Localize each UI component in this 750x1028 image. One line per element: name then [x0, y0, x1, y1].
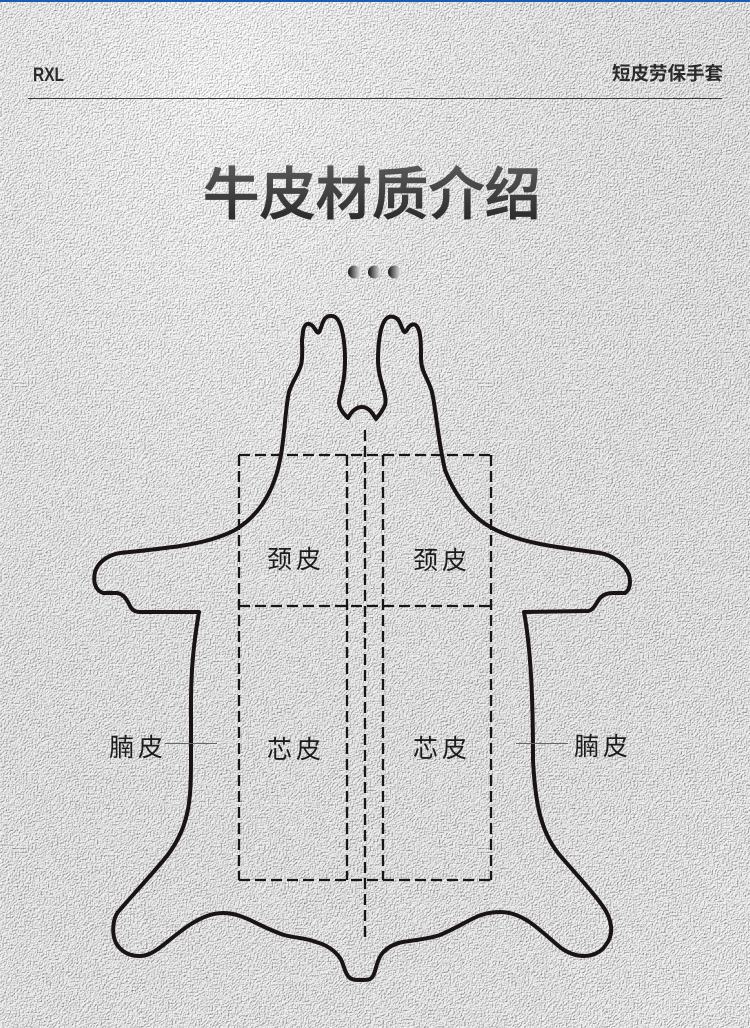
label: core left: 芯皮 [267, 736, 325, 764]
header: brand: RXL [33, 65, 64, 86]
header rule [28, 98, 722, 99]
label: belly left: 腩皮 [109, 734, 167, 762]
top blue bar [0, 0, 750, 2]
leader line left [165, 743, 217, 744]
cowhide outline [94, 316, 630, 980]
label: core right: 芯皮 [413, 735, 471, 763]
three dots ornament [348, 266, 401, 278]
dashed cutting grid [239, 430, 491, 938]
title: 牛皮材质介绍 [203, 149, 541, 231]
header: product name: 短皮劳保手套 [612, 63, 723, 84]
label: belly right: 腩皮 [574, 733, 632, 761]
label: neck right: 颈皮 [413, 547, 471, 575]
leader line right [516, 743, 568, 744]
label: neck left: 颈皮 [267, 546, 325, 574]
